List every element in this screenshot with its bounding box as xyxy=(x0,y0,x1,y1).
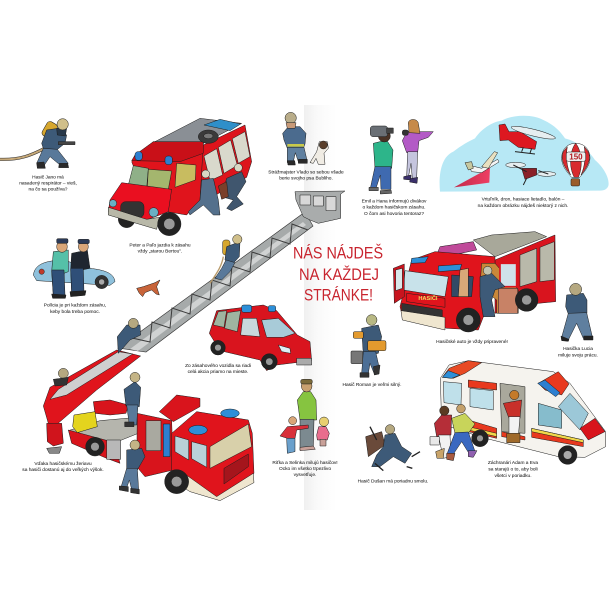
firefighter Vlado and dog xyxy=(283,112,328,165)
caption: Jano: na čo sa používa? xyxy=(29,186,68,192)
caption: Peter and Paľo: Peter a Paľo jazdia k zásahu xyxy=(129,242,191,248)
caption: command car: celá akcia priamo na mieste. xyxy=(188,369,248,375)
caption: Roman: Hasič Roman je veľmi silný. xyxy=(343,382,401,388)
police car and two officers xyxy=(33,239,115,298)
caption: police: keby bola treba pomoc. xyxy=(50,309,100,315)
caption: Lucia: miluje svoju prácu. xyxy=(558,352,598,358)
cameraman Emil and reporter Hana xyxy=(369,119,433,194)
caption: paramedics: všetci v poriadku. xyxy=(494,473,532,479)
caption: Dušan: Hasič Dušan má poriadnu smolu. xyxy=(358,478,428,484)
paramedic in doorway xyxy=(503,400,522,418)
caption: Emil and Hana: Emil a Hana informujú divákov xyxy=(362,198,427,204)
caption: paramedics: sa starajú o to, aby boli xyxy=(488,466,538,472)
command car xyxy=(209,305,312,371)
plane xyxy=(465,152,499,173)
caption: children: Ocko im všetko trpezlivo xyxy=(279,466,331,472)
caption: ladder: sa hasiči dostanú aj do veľkých výšok. xyxy=(22,467,104,473)
caption: Emil and Hana: O čom asi hovoria tentoraz? xyxy=(364,211,424,217)
fire engine with turntable ladder xyxy=(43,318,254,501)
cat xyxy=(137,280,160,297)
caption: aircraft: na každom obrázku nájdeš niektorý z nich. xyxy=(478,203,568,209)
firefighter Lucia xyxy=(561,283,593,341)
caption: command car: Zo zásahového vozidla sa riadi xyxy=(185,363,251,369)
balloon 150: 150 xyxy=(569,152,583,161)
boom xyxy=(43,350,141,424)
heading: NA KAŽDEJ xyxy=(299,265,379,284)
fire engine Hasiči xyxy=(393,232,556,332)
caption: aircraft: Vrtuľník, dron, hasiace lietadlo, balón – xyxy=(482,196,565,202)
paramedic Eva xyxy=(434,415,452,437)
caption: Emil and Hana: o každom hasičskom zásahu. xyxy=(363,204,425,210)
caption: paramedics: Záchranári Adam a Eva xyxy=(488,460,538,466)
old red fire truck Berta xyxy=(108,118,252,236)
caption: children: Riťka a Selinka milujú hasičov! xyxy=(272,460,338,466)
caption: engine: Hasičské auto je vždy pripravené! xyxy=(436,339,508,345)
caption: Jano: Hasič Jano má xyxy=(32,174,64,180)
heading: STRÁNKE! xyxy=(304,286,373,304)
drone xyxy=(506,162,556,185)
caption: children: vysvetľuje. xyxy=(294,472,316,478)
ladder basket xyxy=(295,191,345,223)
balloon 150 xyxy=(562,143,590,186)
fire engine Hasiči: HASIČI xyxy=(418,295,438,302)
heading xyxy=(293,244,383,304)
ambulance xyxy=(430,361,606,464)
caption: Jano: nasadený respirátor – vieš, xyxy=(19,180,77,186)
cloud xyxy=(440,116,609,192)
caption: Vlado: Strážmajster Vlado so sebou všade xyxy=(268,170,344,176)
helicopter xyxy=(499,124,556,154)
firefighter Jano with hose xyxy=(0,119,75,168)
aerial ladder xyxy=(118,191,345,352)
caption: Vlado: berie svojho psa Bubliho. xyxy=(279,176,333,182)
firefighter beside truck xyxy=(127,448,145,470)
caption: Peter and Paľo: vždy „starou Bertou". xyxy=(138,248,182,254)
heading: NÁS NÁJDEŠ xyxy=(293,244,383,262)
firefighter on boom xyxy=(117,325,141,353)
firefighter Dušan tripping xyxy=(366,425,420,471)
firefighter Roman with cases xyxy=(351,315,386,377)
firefighter on deck xyxy=(124,382,141,407)
water ramp xyxy=(454,168,490,187)
caption: Lucia: Hasička Lucia xyxy=(563,346,593,352)
firefighter climbing ladder xyxy=(210,235,242,283)
firefighter in basket xyxy=(58,368,68,378)
father and children xyxy=(280,379,329,453)
caption: ladder: Vďaka hasičskému žeriavu xyxy=(34,461,92,467)
paramedic Adam xyxy=(452,413,475,433)
caption: police: Polícia je pri každom zásahu, xyxy=(44,302,106,308)
sky cloud with helicopter, plane, drone, balloon xyxy=(440,116,609,192)
